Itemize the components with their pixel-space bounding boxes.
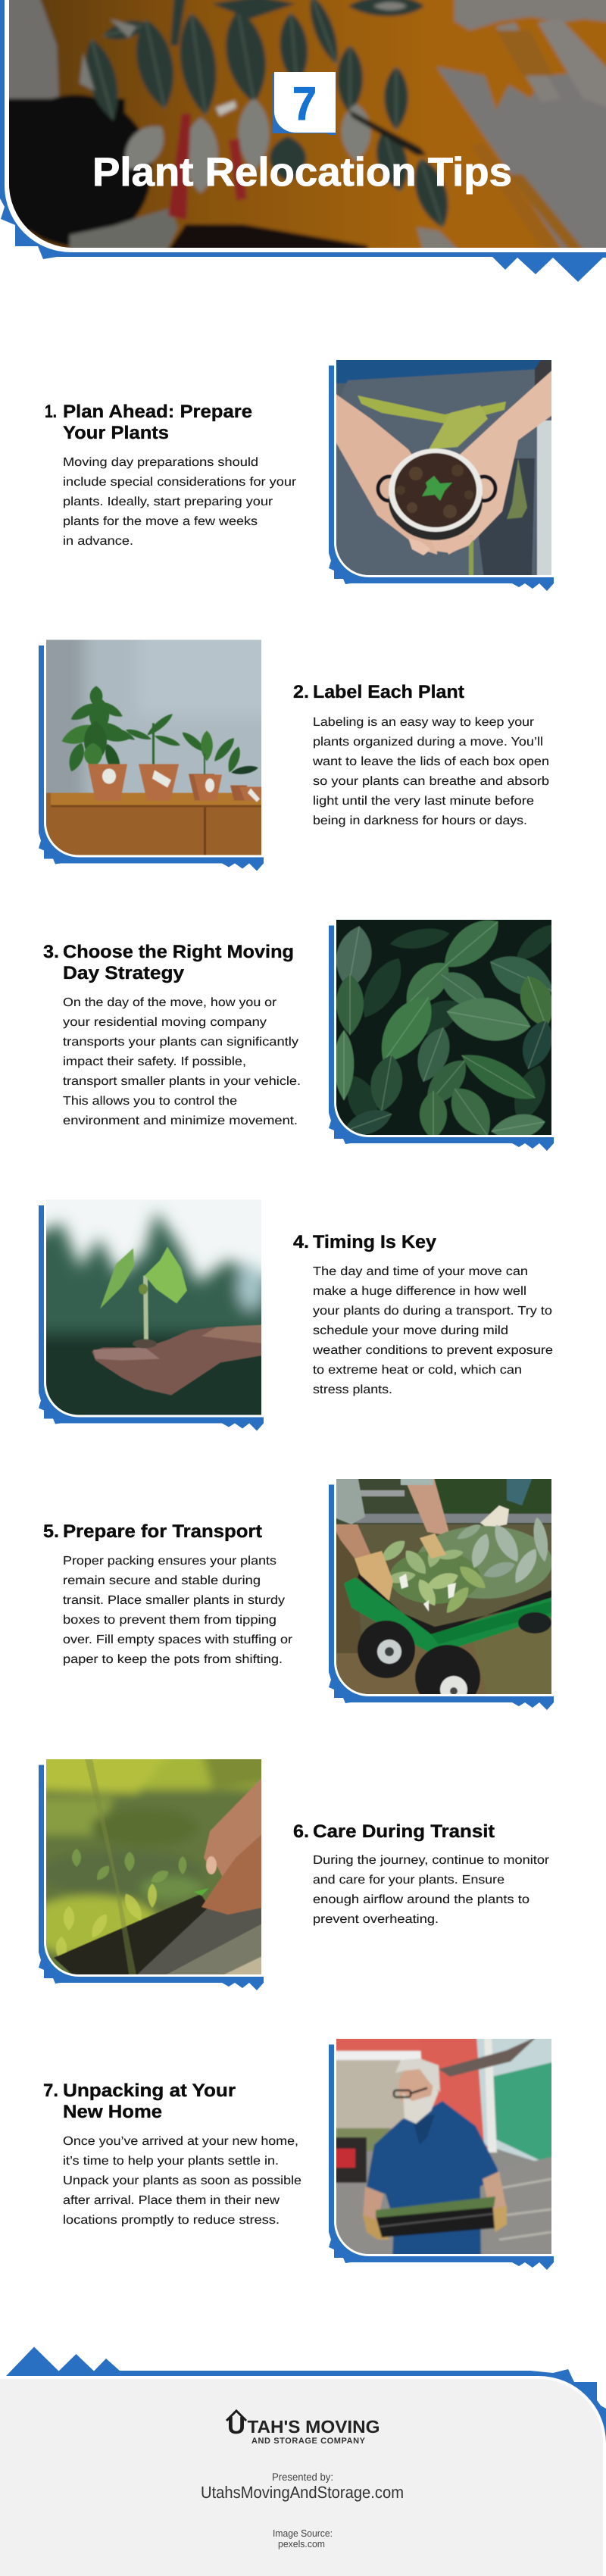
header frame: [0, 0, 606, 282]
tip 5 text: Prepare for Transport: [63, 1521, 262, 1542]
tip 5 photo: green garden cart of plants: [329, 1475, 555, 1710]
tip 4 text: your plants do during a transport. Try to: [313, 1305, 552, 1318]
tip 1 text: plants. Ideally, start preparing your: [63, 496, 273, 508]
tip 3 text: Day Strategy: [63, 963, 185, 983]
tip 2 text: [293, 682, 549, 827]
tip 6 text: and care for your plants. Ensure: [313, 1874, 504, 1887]
tip 1 text: 1.: [45, 402, 57, 422]
tip 7 text: after arrival. Place them in their new: [63, 2194, 280, 2207]
tip 4 text: stress plants.: [313, 1383, 392, 1396]
footer background: [0, 2379, 603, 2576]
image source: Image Source:: [273, 2528, 333, 2539]
tip 3 text: [43, 942, 301, 1127]
header banner: [0, 0, 606, 282]
tip 3 photo: dark green wet leaves: [329, 909, 564, 1151]
presented by: Presented by:: [272, 2471, 333, 2483]
tip 3 text: transport smaller plants in your vehicle.: [63, 1075, 301, 1088]
tip 4 text: The day and time of your move can: [313, 1265, 528, 1278]
tip 3 text: 3.: [43, 942, 59, 962]
tip 4 text: to extreme heat or cold, which can: [313, 1364, 522, 1377]
tip 4 text: 4.: [293, 1232, 309, 1252]
tip 4 text: make a huge difference in how well: [313, 1285, 526, 1298]
tip 3 text: transports your plants can significantly: [63, 1036, 298, 1049]
tip 7 photo: man carrying a tray of seedlings: [329, 2035, 555, 2270]
tip 4 text: Timing Is Key: [313, 1232, 437, 1252]
tip 7 text: Once you’ve arrived at your new home,: [63, 2135, 298, 2148]
tip 7 text: it’s time to help your plants settle in.: [63, 2155, 279, 2168]
website: UtahsMovingAndStorage.com: [201, 2483, 404, 2502]
tip 1 text: Plan Ahead: Prepare: [63, 402, 252, 422]
number badge: [273, 72, 336, 135]
tip 2 text: light until the very last minute before: [313, 795, 534, 808]
tip 5 text: over. Fill empty spaces with stuffing or: [63, 1633, 293, 1646]
company logo: TAH'S MOVING: [247, 2417, 380, 2437]
company logo: AND STORAGE COMPANY: [251, 2437, 366, 2446]
tip 4 photo: seedling held in a hand: [39, 1200, 264, 1430]
tip 6 text: Care During Transit: [313, 1821, 495, 1842]
tip 1 photo: hands holding a potted seedling: [329, 356, 556, 591]
tip 2 text: Label Each Plant: [313, 682, 464, 702]
footer panel: [0, 2347, 606, 2576]
header photo: plant leaves on orange wall: [0, 0, 606, 258]
tip 5 text: [43, 1521, 293, 1666]
tip 5 text: remain secure and stable during: [63, 1574, 261, 1587]
tip 7 text: New Home: [63, 2102, 162, 2122]
tip 2 text: Labeling is an easy way to keep your: [313, 716, 535, 729]
tip 2 text: being in darkness for hours or days.: [313, 814, 527, 827]
tip 2 photo: labelled terracotta pots on a cabinet: [39, 639, 264, 871]
tip 6 text: 6.: [293, 1821, 309, 1842]
tip 1 text: Moving day preparations should: [63, 456, 258, 469]
image source: pexels.com: [278, 2538, 325, 2549]
tip 6 photo: hands tending seedling trays: [39, 1759, 264, 1990]
tip 3 text: This allows you to control the: [63, 1095, 237, 1108]
tip 3 text: On the day of the move, how you or: [63, 996, 277, 1009]
tip 5 text: Proper packing ensures your plants: [63, 1555, 276, 1568]
tip 4 text: weather conditions to prevent exposure: [312, 1344, 553, 1357]
tip 1 text: plants for the move a few weeks: [63, 515, 258, 528]
footer frame with mountain peaks: [6, 2347, 606, 2443]
tip 3 text: Choose the Right Moving: [63, 942, 294, 962]
tip 2 text: plants organized during a move. You’ll: [313, 736, 543, 749]
tip 4 text: [293, 1232, 553, 1396]
tip 5 text: boxes to prevent them from tipping: [63, 1614, 276, 1627]
tip 7 text: [43, 2080, 301, 2227]
tip 1 text: include special considerations for your: [63, 476, 297, 489]
tip 6 text: During the journey, continue to monitor: [313, 1854, 550, 1867]
tip 7 text: Unpacking at Your: [63, 2080, 236, 2101]
tip 1 text: in advance.: [63, 535, 133, 548]
company logo: [226, 2411, 380, 2446]
number badge: 7: [292, 78, 317, 130]
title: Plant Relocation Tips: [92, 150, 512, 195]
tip 3 text: impact their safety. If possible,: [63, 1055, 246, 1068]
tip 6 text: enough airflow around the plants to: [313, 1893, 529, 1906]
tip 5 text: paper to keep the pots from shifting.: [63, 1653, 283, 1666]
tip 3 text: environment and minimize movement.: [63, 1114, 298, 1127]
tip 6 text: prevent overheating.: [313, 1913, 439, 1926]
tip 7 text: Unpack your plants as soon as possible: [63, 2174, 301, 2187]
tip 3 text: your residential moving company: [63, 1016, 267, 1029]
tip 4 text: schedule your move during mild: [313, 1324, 508, 1337]
tip 7 text: 7.: [43, 2080, 58, 2101]
company logo: U: [227, 2412, 245, 2439]
tip 1 text: [45, 402, 297, 548]
tip 7 text: locations promptly to reduce stress.: [63, 2214, 280, 2227]
tip 2 text: so your plants can breathe and absorb: [313, 775, 549, 788]
tip 2 text: 2.: [293, 682, 309, 702]
tip 6 text: [293, 1821, 550, 1926]
image source: [273, 2528, 333, 2549]
tip 1 text: Your Plants: [63, 423, 169, 443]
tip 5 text: 5.: [43, 1521, 59, 1542]
tip 2 text: want to leave the lids of each box open: [312, 755, 549, 768]
tip 5 text: transit. Place smaller plants in sturdy: [63, 1594, 285, 1607]
